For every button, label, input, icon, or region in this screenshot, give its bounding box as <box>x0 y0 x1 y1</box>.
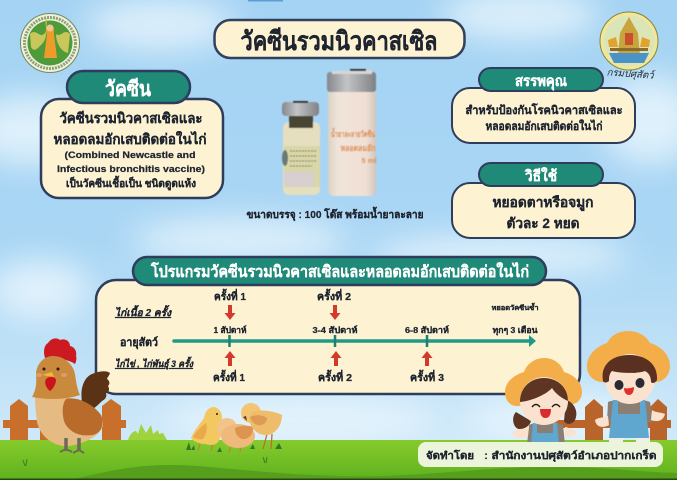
benefits text: สำหรับป้องกันโรคนิวคาสเซิลและ <box>466 102 622 117</box>
dose labels above axis <box>214 288 351 303</box>
large vial <box>327 69 377 196</box>
age labels above axis <box>214 325 538 336</box>
credit footer: : <box>484 451 488 462</box>
age labels above axis: 1 สัปดาห์ <box>214 325 247 335</box>
boy head <box>605 354 655 404</box>
small vial <box>282 101 320 195</box>
pack size caption: ขนาดบรรจุ : 100 โด๊ส พร้อมน้ำยาละลาย <box>246 206 424 222</box>
vaccine description text: หลอดลมอักเสบติดต่อในไก่ <box>54 130 206 147</box>
girl hat <box>505 358 582 406</box>
girl head <box>520 377 568 425</box>
head <box>32 356 80 399</box>
vial label: 5 ml <box>361 156 377 165</box>
credit footer <box>418 442 663 467</box>
wing <box>63 398 103 435</box>
vaccine description text: (Combined Newcastle and <box>64 150 196 161</box>
illustration: girl <box>505 358 582 445</box>
programme heading pill <box>133 257 546 285</box>
age labels above axis: ทุกๆ 3 เดือน <box>492 325 538 336</box>
vaccine heading pill: วัคซีน <box>105 77 152 101</box>
panel: benefits <box>452 68 635 143</box>
red arrows up <box>224 351 432 366</box>
title banner <box>214 20 464 58</box>
age label: อายุสัตว์ <box>120 336 158 350</box>
grass tuft <box>128 424 167 440</box>
boy overalls <box>607 399 653 422</box>
repeat vaccination note: หยอดวัคซีนซ้ำ <box>492 302 539 312</box>
illustration: chicks <box>191 403 282 452</box>
benefits heading pill: สรรพคุณ <box>515 73 567 91</box>
vial label: น้ำยาละลายวัคซีน <box>331 127 375 139</box>
vial label <box>331 127 377 165</box>
benefits text <box>466 102 622 133</box>
dose labels below axis: ครั้งที่ 2 <box>318 369 352 384</box>
chick right <box>241 403 282 449</box>
benefits heading pill <box>479 68 603 91</box>
logo caption: กรมปศุสัตว์ <box>606 66 656 82</box>
dose labels above axis: ครั้งที่ 1 <box>214 288 246 303</box>
usage text: หยอดตาหรือจมูก <box>492 194 594 211</box>
body <box>35 396 103 446</box>
dose labels below axis <box>213 369 444 384</box>
dose labels below axis: ครั้งที่ 1 <box>213 369 245 384</box>
layer and breeder label: ไก่ไข่ , ไก่พันธุ์ 3 ครั้ง <box>115 356 194 370</box>
vaccine description text: เป็นวัคซีนเชื้อเป็น ชนิดดูดแห้ง <box>66 175 196 191</box>
chick left <box>191 407 222 451</box>
vial label: หลอดลมอัก <box>340 143 376 153</box>
usage heading pill <box>479 163 603 186</box>
left fence <box>3 399 126 440</box>
vaccine description text: Infectious bronchitis vaccine) <box>57 164 205 175</box>
ground and fence <box>0 399 677 480</box>
vaccine description text <box>54 110 206 191</box>
dose labels above axis: ครั้งที่ 2 <box>317 288 351 303</box>
age labels above axis: 3-4 สัปดาห์ <box>312 325 358 335</box>
usage text <box>492 194 594 231</box>
broiler label: ไก่เนื้อ 2 ครั้ง <box>115 305 172 319</box>
panel: vaccine description <box>41 71 223 198</box>
title banner: วัคซีนรวมนิวคาสเซิล <box>240 26 438 56</box>
boy hat <box>587 331 670 382</box>
girl hair <box>513 400 576 429</box>
dose labels below axis: ครั้งที่ 3 <box>410 369 444 384</box>
vaccine vials photo <box>282 69 377 196</box>
red arrows down <box>224 305 340 320</box>
illustration: rooster <box>32 338 110 453</box>
legs <box>66 438 79 451</box>
comb <box>44 338 76 364</box>
programme heading pill: โปรแกรมวัคซีนรวมนิวคาสเซิลและหลอดลมอักเสบติดต่อในไก่ <box>150 261 529 281</box>
credit office name: สำนักงานปศุสัตว์อำเภอปากเกร็ด <box>492 448 656 462</box>
vaccine description text: วัคซีนรวมนิวคาสเซิลและ <box>60 110 202 126</box>
girl face <box>532 404 560 407</box>
girl overalls <box>527 422 565 445</box>
panel: usage <box>452 163 635 238</box>
chick middle <box>217 418 255 452</box>
usage text: ตัวละ 2 หยด <box>506 215 580 231</box>
age timeline axis <box>174 335 536 347</box>
illustration: boy <box>587 331 670 445</box>
tail <box>81 371 110 410</box>
logo: livestock office seal <box>20 14 80 72</box>
vaccine heading pill <box>67 71 190 103</box>
panel: vaccination programme <box>96 257 580 394</box>
right fence <box>555 399 671 445</box>
benefits text: หลอดลมอักเสบติดต่อในไก่ <box>486 119 603 133</box>
usage heading pill: วิธีใช้ <box>524 167 557 185</box>
credit label: จัดทำโดย <box>426 449 474 462</box>
boy face <box>614 380 624 390</box>
logo: department of livestock seal <box>600 12 658 82</box>
age labels above axis: 6-8 สัปดาห์ <box>405 325 449 335</box>
